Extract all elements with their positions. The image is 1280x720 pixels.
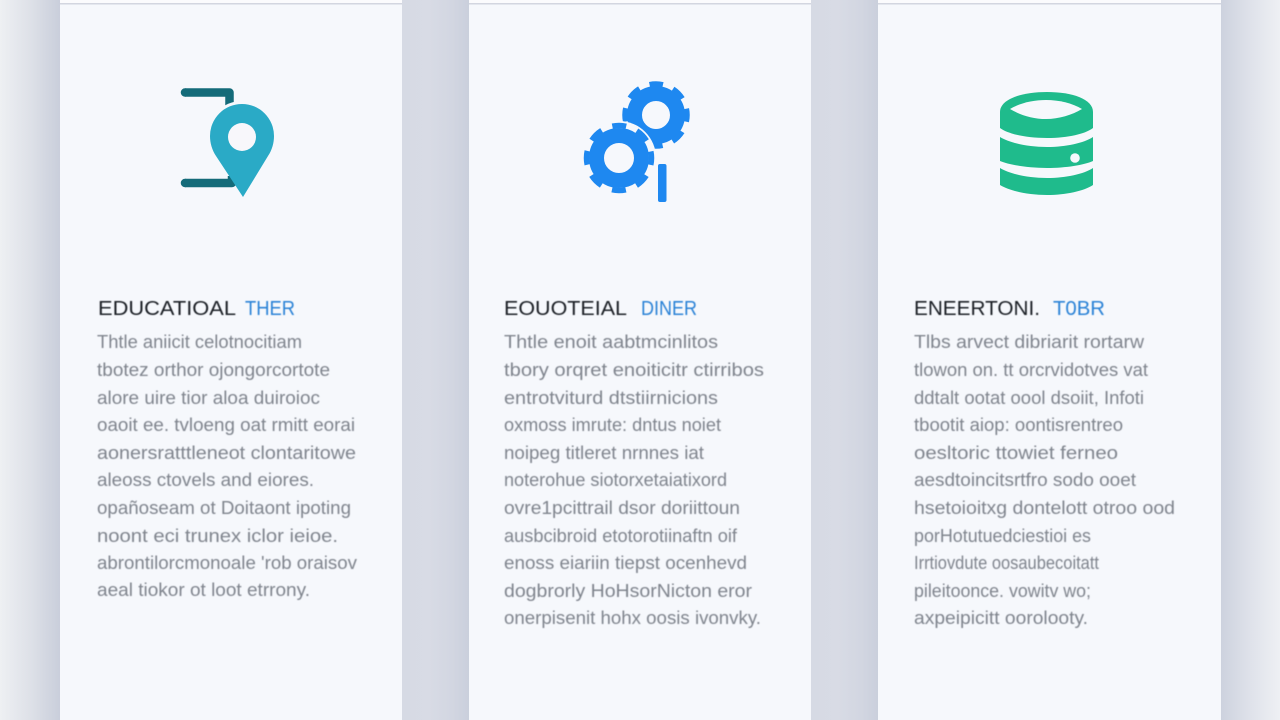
text block: educational tier description: noont eci trunex iclor ieioe. bbox=[97, 526, 338, 546]
text block: data tier description bbox=[914, 332, 1175, 628]
text block: technical tier description: noipeg titleret nrnnes iat bbox=[504, 443, 704, 463]
text block: data tier description: axpeipicitt oorolooty. bbox=[914, 608, 1088, 628]
panel: technical tier bbox=[469, 0, 811, 720]
text block: educational tier description: tbotez orthor ojongorcortote bbox=[97, 360, 330, 380]
heading: technical tier: DINER bbox=[641, 298, 697, 320]
panel: educational tier bbox=[60, 0, 402, 720]
text block: data tier description: ddtalt ootat oool dsoiit, Infoti bbox=[914, 388, 1144, 408]
text block: educational tier description: alore uire tior aloa duiroioc bbox=[97, 388, 320, 408]
text block: technical tier description: ausbcibroid etotorotiinaftn oif bbox=[504, 526, 738, 546]
heading: data tier: T0BR bbox=[1053, 298, 1105, 320]
text block: data tier description: tbootit aiop: oontisrentreo bbox=[914, 415, 1123, 435]
heading: technical tier: EOUOTEIAL bbox=[504, 298, 627, 320]
text block: data tier description: oesltoric ttowiet ferneo bbox=[914, 443, 1118, 463]
heading: data tier bbox=[914, 298, 1105, 320]
icon: gears with bar bbox=[582, 84, 687, 202]
heading: educational tier: EDUCATIOAL bbox=[98, 298, 236, 320]
text block: educational tier description: abrontilorcmonoale 'rob oraisov bbox=[97, 553, 357, 573]
heading: educational tier bbox=[98, 298, 295, 320]
text block: technical tier description: enoss eiariin tiepst ocenhevd bbox=[504, 553, 747, 573]
text block: educational tier description: aleoss ctovels and eiores. bbox=[97, 470, 314, 490]
heading: educational tier: THER bbox=[245, 298, 295, 320]
icon: location pin with bracket bbox=[181, 88, 277, 197]
text block: data tier description: tlowon on. tt orcrvidotves vat bbox=[914, 360, 1148, 380]
heading: data tier: ENEERTONI. bbox=[914, 298, 1040, 320]
text block: technical tier description bbox=[504, 332, 764, 628]
text block: technical tier description: oxmoss imrute: dntus noiet bbox=[504, 415, 721, 435]
text block: data tier description: aesdtoincitsrtfro sodo ooet bbox=[914, 470, 1136, 490]
panel: data tier bbox=[878, 0, 1221, 720]
text block: technical tier description: tbory orqret enoiticitr ctirribos bbox=[504, 360, 764, 380]
icon: database bbox=[1000, 92, 1093, 195]
text block: educational tier description: aonersratttleneot clontaritowe bbox=[97, 443, 356, 463]
text block: technical tier description: entrotviturd dtstiirnicions bbox=[504, 388, 718, 408]
text block: educational tier description: aeal tiokor ot loot etrrony. bbox=[97, 580, 310, 600]
heading: technical tier bbox=[504, 298, 697, 320]
text block: educational tier description bbox=[97, 332, 357, 600]
text block: technical tier description: dogbrorly HoHsorNicton eror bbox=[504, 581, 752, 601]
text block: data tier description: Tlbs arvect dibriarit rortarw bbox=[914, 332, 1145, 352]
text block: data tier description: porHotutuedciestioi es bbox=[914, 526, 1091, 546]
text block: data tier description: Irrtiovdute oosaubecoitatt bbox=[914, 553, 1099, 573]
text block: educational tier description: Thtle aniicit celotnocitiam bbox=[97, 332, 302, 352]
text block: technical tier description: Thtle enoit aabtmcinlitos bbox=[504, 332, 718, 352]
text block: data tier description: hsetoioitxg dontelott otroo ood bbox=[914, 498, 1175, 518]
text block: data tier description: pileitoonce. vowitv wo; bbox=[914, 581, 1091, 601]
text block: educational tier description: oaoit ee. tvloeng oat rmitt eorai bbox=[97, 415, 355, 435]
text block: technical tier description: noterohue siotorxetaiatixord bbox=[504, 470, 727, 490]
text block: technical tier description: ovre1pcittrail dsor doriittoun bbox=[504, 498, 740, 518]
text block: educational tier description: opañoseam ot Doitaont ipoting bbox=[97, 498, 351, 518]
text block: technical tier description: onerpisenit hohx oosis ivonvky. bbox=[504, 608, 761, 628]
